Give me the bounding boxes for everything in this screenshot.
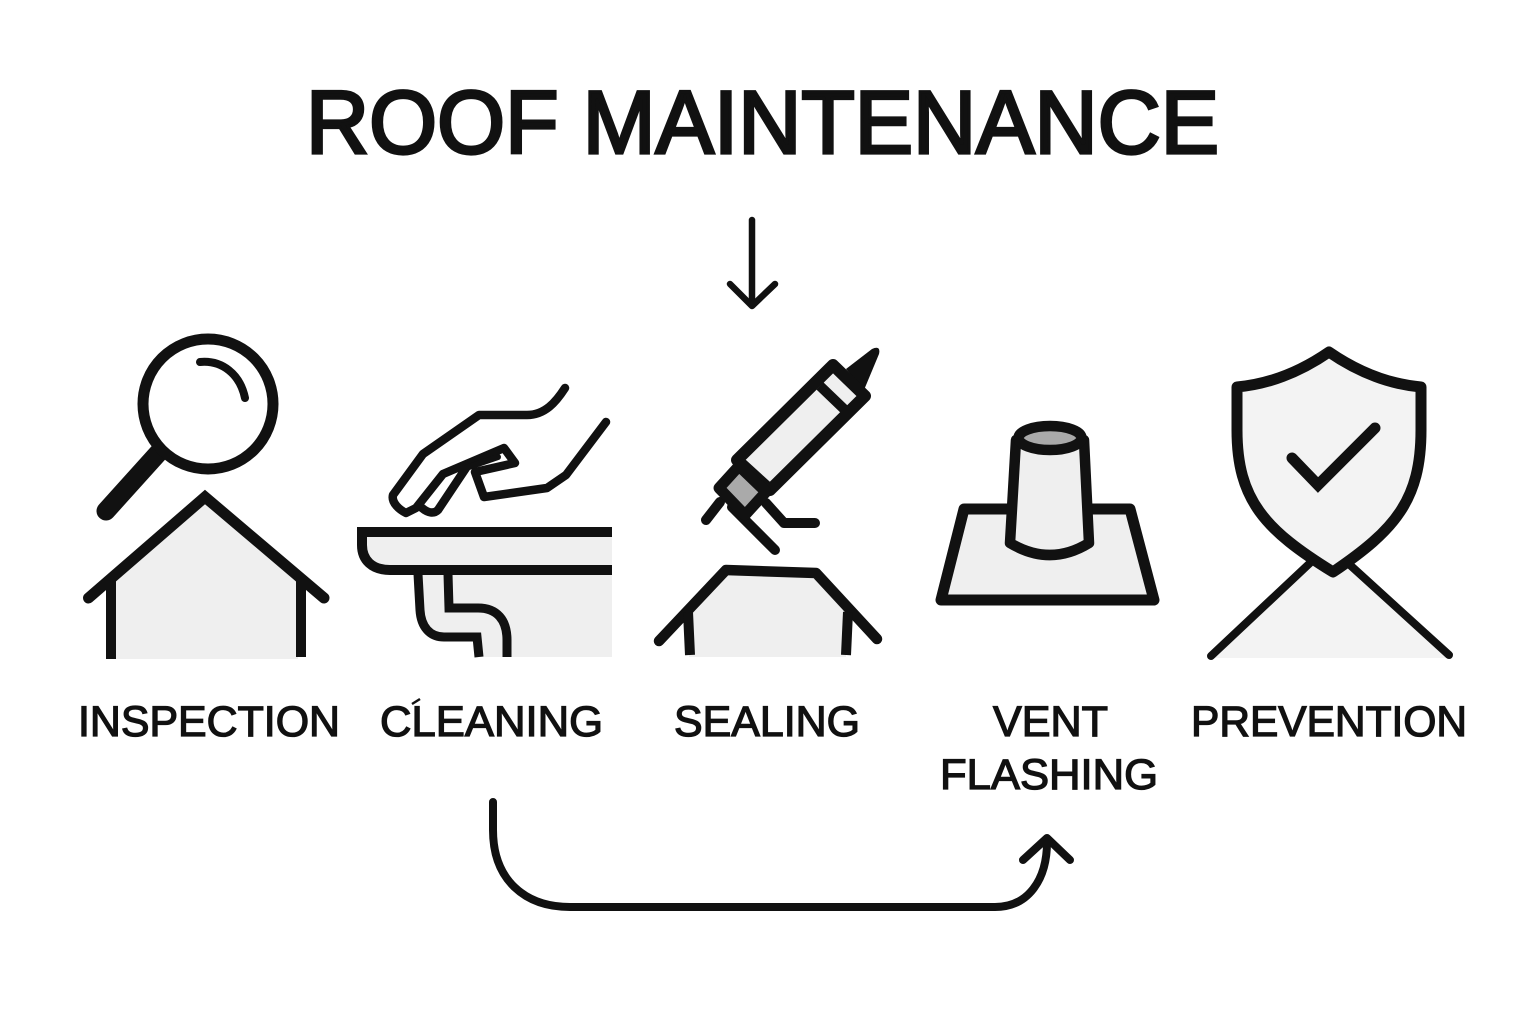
arrow: curved from cleaning to vent flashing (493, 802, 1070, 907)
arrow: down from title (730, 220, 775, 306)
icon: sealing (659, 348, 879, 657)
label: prevention: PREVENTION (1191, 699, 1467, 746)
label: vent flashing: VENT (993, 699, 1108, 746)
icon: prevention (1211, 352, 1449, 658)
label: vent flashing: FLASHING (940, 752, 1158, 799)
icon: cleaning (362, 388, 612, 657)
icon: vent flashing (941, 426, 1154, 600)
label: sealing: SEALING (674, 699, 860, 746)
label: cleaning: CLEANING (380, 699, 603, 746)
title: ROOF MAINTENANCE (306, 72, 1219, 172)
label: inspection: INSPECTION (78, 699, 340, 746)
icon: inspection (88, 339, 324, 659)
label: vent flashing (940, 699, 1158, 799)
